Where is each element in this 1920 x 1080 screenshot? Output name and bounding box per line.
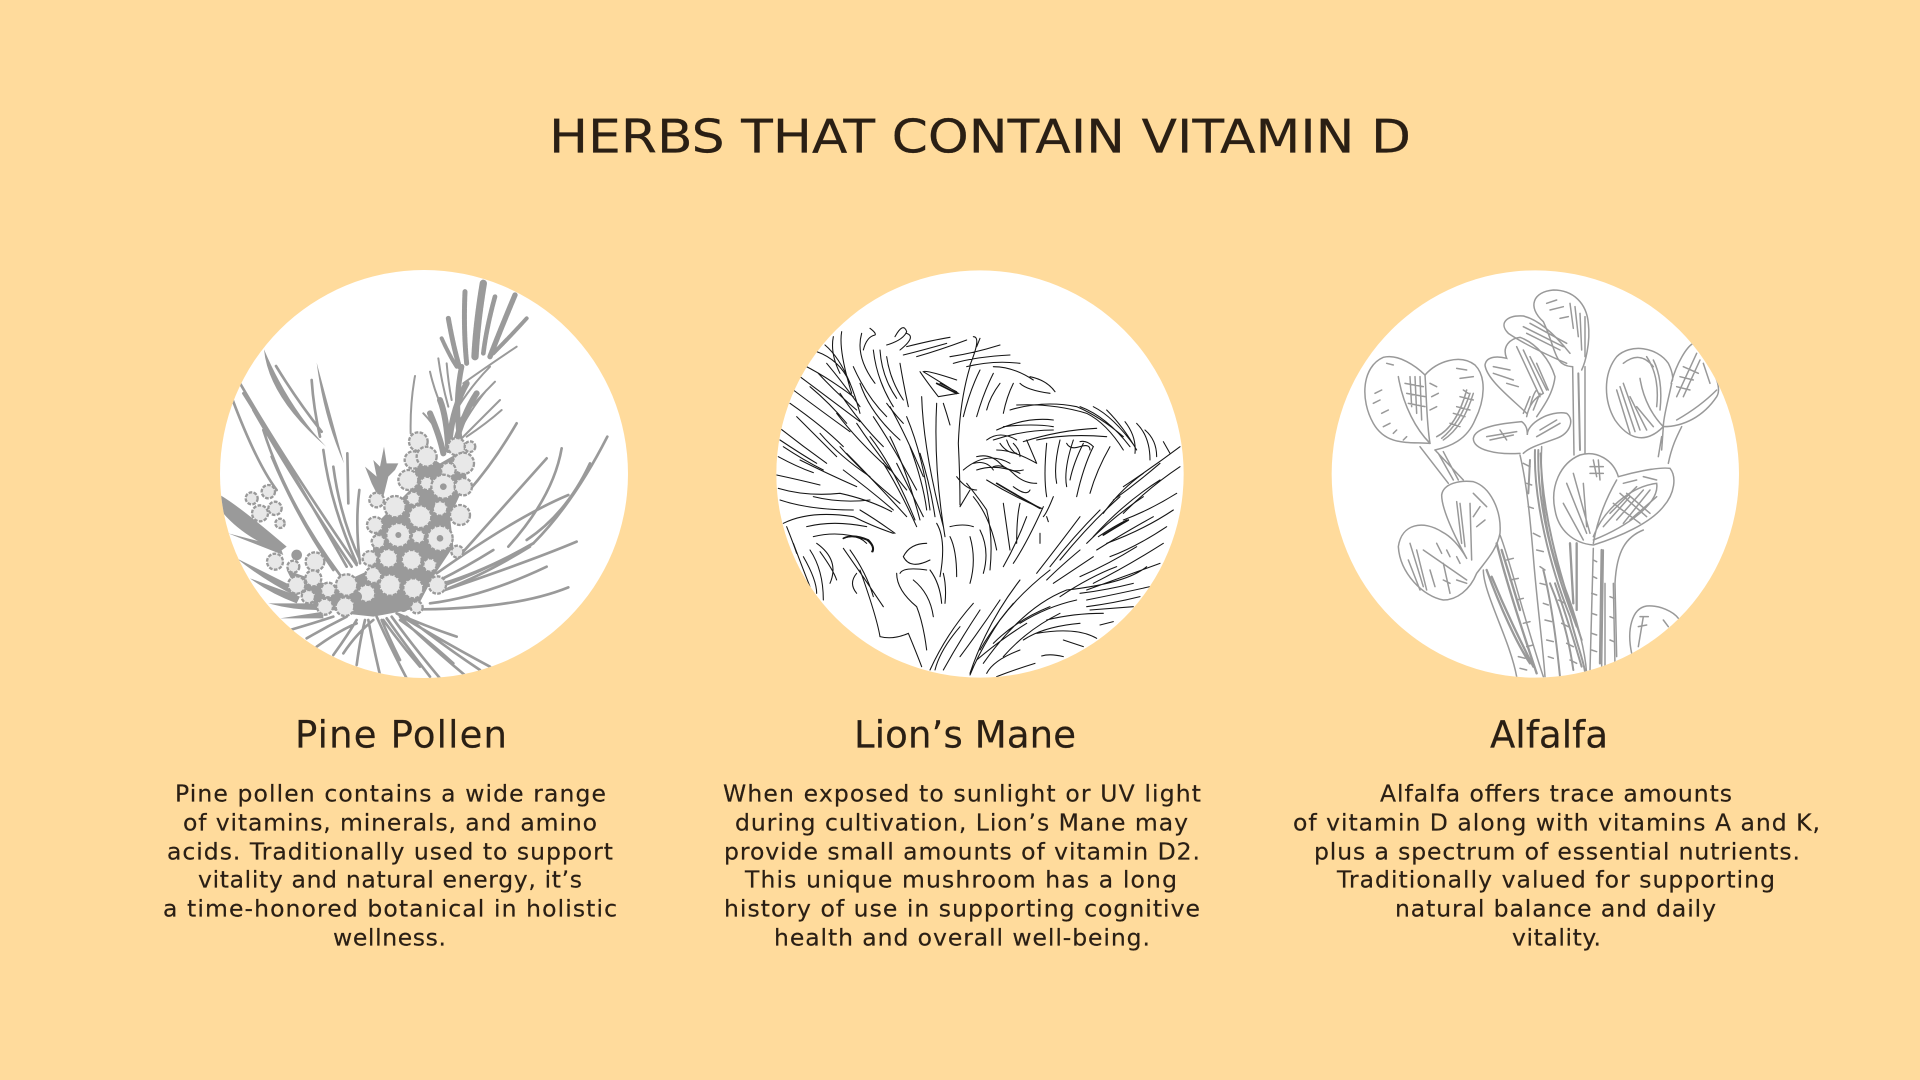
- heading: alfalfa: Alfalfa: [1490, 714, 1608, 756]
- text block: pine pollen description: acids. Traditionally used to support: [167, 838, 613, 866]
- text block: lion's mane description: When exposed to sunlight or UV light: [723, 780, 1201, 808]
- text block: lion's mane description: during cultivation, Lion’s Mane may: [735, 808, 1188, 836]
- icon: alfalfa illustration in white circle: [1332, 270, 1739, 678]
- text block: alfalfa description: [1293, 780, 1820, 952]
- pollen shadows: [291, 467, 447, 615]
- text block: pine pollen description: [163, 780, 617, 952]
- icon: pine pollen illustration in white circle: [220, 270, 628, 678]
- text block: alfalfa description: natural balance and daily: [1395, 894, 1716, 922]
- icon: lion's mane illustration in white circle: [776, 270, 1184, 678]
- heading: lion's mane: Lion’s Mane: [854, 714, 1076, 756]
- text block: alfalfa description: plus a spectrum of essential nutrients.: [1314, 838, 1800, 866]
- text block: pine pollen description: wellness.: [333, 924, 446, 952]
- text block: pine pollen description: vitality and natural energy, it’s: [198, 866, 582, 894]
- text block: alfalfa description: of vitamin D along with vitamins A and K,: [1293, 808, 1820, 836]
- heading: pine pollen: Pine Pollen: [295, 714, 507, 756]
- panel: lion's mane: [723, 270, 1201, 952]
- text block: lion's mane description: [723, 780, 1201, 952]
- text block: pine pollen description: of vitamins, minerals, and amino: [183, 808, 597, 836]
- text block: lion's mane description: health and overall well-being.: [774, 924, 1150, 952]
- text block: pine pollen description: a time-honored botanical in holistic: [163, 894, 617, 922]
- pollen clusters: [246, 432, 475, 616]
- text block: alfalfa description: Traditionally valued for supporting: [1336, 866, 1775, 894]
- text block: lion's mane description: provide small amounts of vitamin D2.: [724, 838, 1200, 866]
- text block: lion's mane description: This unique mushroom has a long: [744, 866, 1177, 894]
- text block: alfalfa description: Alfalfa offers trace amounts: [1380, 780, 1732, 808]
- panel: alfalfa: [1293, 270, 1820, 952]
- text block: pine pollen description: Pine pollen contains a wide range: [175, 780, 606, 808]
- panel: pine pollen: [163, 270, 628, 952]
- text block: lion's mane description: history of use in supporting cognitive: [724, 894, 1200, 922]
- text block: alfalfa description: vitality.: [1512, 924, 1601, 952]
- title: HERBS THAT CONTAIN VITAMIN D: [549, 110, 1411, 164]
